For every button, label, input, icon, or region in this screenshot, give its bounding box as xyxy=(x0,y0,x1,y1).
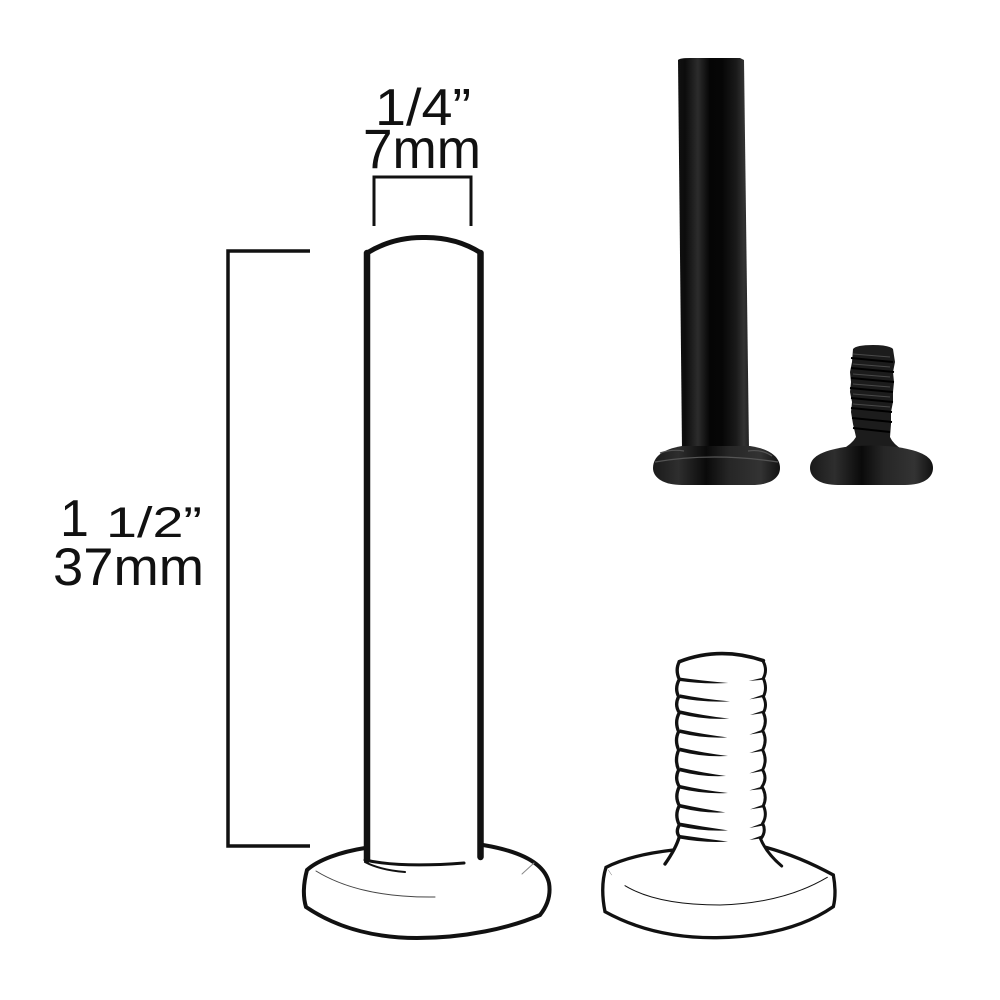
label: length 1 1/2 inch 37mm: 1/2” xyxy=(106,499,202,547)
label: diameter 1/4 inch 7mm: 7mm xyxy=(363,117,481,180)
label: diameter 1/4 inch 7mm: 1/4” xyxy=(375,79,471,137)
photo: short black screw xyxy=(810,345,933,485)
label: length 1 1/2 inch 37mm xyxy=(53,490,204,597)
illustration: long post outline xyxy=(304,237,550,938)
label: diameter 1/4 inch 7mm xyxy=(363,79,481,180)
label: length 1 1/2 inch 37mm: 37mm xyxy=(53,538,204,597)
bracket: length xyxy=(228,251,310,846)
label: length 1 1/2 inch 37mm: 1 xyxy=(60,490,89,548)
bracket: diameter xyxy=(374,177,471,226)
photo: long black post xyxy=(653,58,780,485)
illustration: short screw outline xyxy=(603,654,835,938)
